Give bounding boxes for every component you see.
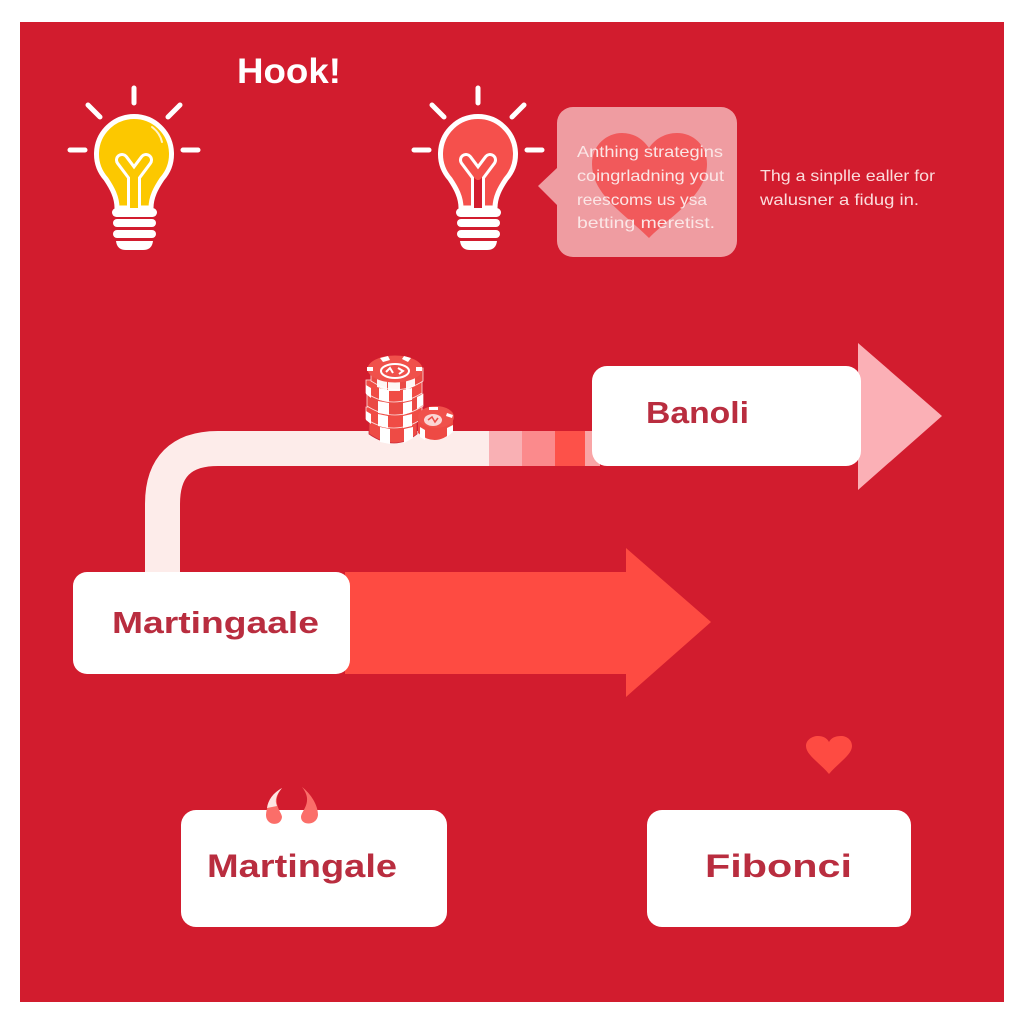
title: Hook!: [237, 52, 341, 91]
side note text: [759, 168, 936, 209]
card: Martingale: [181, 810, 447, 927]
bubble text: Anthing strategins: [577, 144, 723, 161]
arrow: orange-red lower arrow: [345, 548, 711, 697]
card: Banoli: [592, 366, 861, 466]
bubble text: reescoms us ysa: [577, 192, 707, 209]
card: Martingaale: [73, 572, 350, 674]
bubble text: [577, 144, 725, 232]
large chip stack: [366, 356, 423, 444]
bubble text: betting meretist.: [577, 215, 715, 232]
arrow: pink upper arrow: [600, 343, 942, 490]
icon: heart in bubble: [592, 133, 707, 238]
curved path track: [162, 431, 600, 580]
icon: devil horns: [266, 787, 318, 824]
icon: poker chip stacks: [366, 356, 454, 444]
icon: yellow light bulb: [70, 88, 198, 250]
card: Banoli: Banoli: [646, 395, 749, 430]
card: Fibonci: [647, 810, 911, 927]
speech bubble: [538, 107, 737, 257]
side note text: walusner a fidug in.: [759, 192, 919, 209]
card: Martingaale: Martingaale: [112, 605, 319, 640]
side note text: Thg a sinplle ealler for: [760, 168, 936, 185]
small chip stack: [418, 406, 454, 440]
icon: heart: [806, 736, 852, 774]
bubble text: coingrladning yout: [577, 168, 725, 185]
card: Martingale: Martingale: [207, 848, 397, 884]
card: Fibonci: Fibonci: [705, 848, 852, 884]
icon: red light bulb: [414, 88, 542, 250]
